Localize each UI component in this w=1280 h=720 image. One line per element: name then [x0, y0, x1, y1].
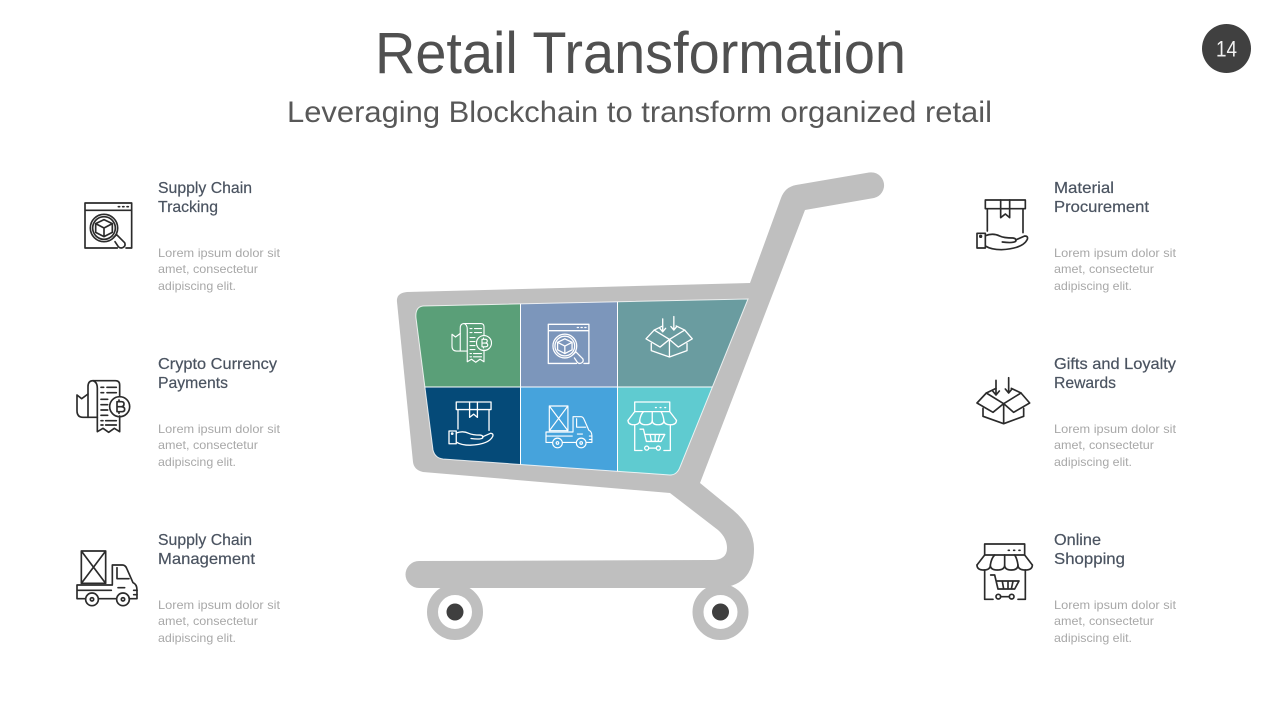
basket icon: tracking [548, 324, 589, 363]
basket icon: crypto receipt [452, 324, 492, 362]
icon: bitcoin receipt [77, 381, 130, 432]
description [158, 422, 281, 469]
icon: online shop [977, 544, 1032, 599]
description: amet, consectetur [1054, 262, 1154, 276]
icon: hand holding box [977, 200, 1028, 250]
heading: Material [1054, 180, 1114, 197]
description: Lorem ipsum dolor sit [1054, 422, 1177, 436]
item: Material Procurement [977, 180, 1177, 293]
basket icon: online shop [628, 402, 676, 450]
basket icon: procurement [449, 402, 493, 445]
heading: Shopping [1054, 551, 1125, 568]
heading: Gifts and Loyalty [1054, 356, 1176, 373]
description: amet, consectetur [1054, 438, 1154, 452]
description: amet, consectetur [158, 438, 258, 452]
description: amet, consectetur [158, 262, 258, 276]
description: Lorem ipsum dolor sit [158, 598, 281, 612]
heading: Rewards [1054, 375, 1116, 392]
description: Lorem ipsum dolor sit [158, 246, 281, 260]
description: amet, consectetur [158, 614, 258, 628]
left wheel [432, 590, 478, 634]
item: Online Shopping [977, 532, 1177, 645]
item: Supply Chain Tracking [85, 180, 281, 293]
item: Crypto Currency Payments [77, 356, 281, 469]
description [1054, 598, 1177, 645]
shopping cart illustration [397, 172, 884, 634]
page number badge [1202, 24, 1251, 73]
basket grid [410, 295, 752, 480]
description: adipiscing elit. [158, 631, 236, 645]
description: adipiscing elit. [1054, 279, 1132, 293]
icon: tracking window [85, 203, 132, 248]
icon: delivery truck [77, 551, 137, 606]
heading: Crypto Currency [158, 356, 277, 373]
heading [1054, 532, 1125, 568]
heading: Tracking [158, 199, 218, 216]
description: amet, consectetur [1054, 614, 1154, 628]
page number badge: 14 [1216, 36, 1237, 62]
item: Gifts and Loyalty Rewards [977, 356, 1177, 469]
heading [1054, 356, 1176, 392]
description: adipiscing elit. [1054, 455, 1132, 469]
heading [1054, 180, 1150, 216]
basket icon: open box [646, 317, 692, 357]
basket icon: truck [546, 406, 592, 448]
description [158, 598, 281, 645]
description [158, 246, 281, 293]
description: Lorem ipsum dolor sit [158, 422, 281, 436]
heading: Online [1054, 532, 1101, 549]
right wheel [698, 590, 743, 634]
subtitle: Leveraging Blockchain to transform organized retail [287, 96, 992, 129]
description: Lorem ipsum dolor sit [1054, 598, 1177, 612]
heading: Payments [158, 375, 228, 392]
description [1054, 422, 1177, 469]
heading [158, 356, 277, 392]
title: Retail Transformation [375, 21, 906, 86]
description: adipiscing elit. [158, 455, 236, 469]
description: adipiscing elit. [158, 279, 236, 293]
item: Supply Chain Management [77, 532, 281, 645]
icon: open box [977, 378, 1030, 424]
heading: Supply Chain [158, 180, 252, 197]
description: adipiscing elit. [1054, 631, 1132, 645]
description: Lorem ipsum dolor sit [1054, 246, 1177, 260]
description [1054, 246, 1177, 293]
cart frame [397, 172, 884, 588]
heading: Management [158, 551, 256, 568]
heading [158, 180, 252, 216]
heading [158, 532, 256, 568]
heading: Procurement [1054, 199, 1150, 216]
heading: Supply Chain [158, 532, 252, 549]
